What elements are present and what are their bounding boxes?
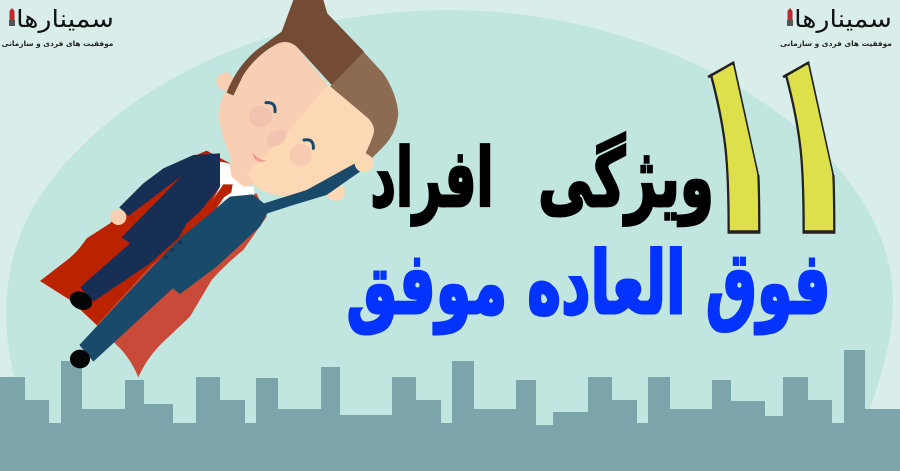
logo wordmark: سمینارها [794,5,892,34]
right hand [355,154,373,172]
number 11 [708,61,836,234]
back cape [40,151,230,325]
back shoe [67,288,95,313]
word: ویژگی: ویژگی [538,132,714,226]
head: light side [243,83,374,197]
front shoe [70,350,90,368]
logo: top right [780,5,892,48]
head: shaded side [218,42,328,187]
logo icon [787,8,793,26]
hair: dark side [227,0,364,96]
logo wordmark: سمینارها [16,5,114,34]
cheek left [249,106,272,128]
ear [216,73,234,91]
first digit [708,61,760,234]
nose [263,126,290,150]
front cape [97,193,267,377]
jacket buttons [164,241,182,259]
tie [179,184,233,237]
hair: light side [330,52,398,160]
front suit and arm [79,163,360,362]
eye right [304,140,313,148]
hidden hand [326,182,345,201]
back arm and leg [80,153,220,302]
cheek right [290,144,312,166]
logo tagline: موفقیت های فردی و سازمانی [780,39,892,48]
left hand [110,209,126,225]
city skyline [0,350,900,471]
logo: top left [2,5,114,48]
second digit [782,61,836,234]
mouth [253,153,267,162]
heading: blue: فوق العاده موفق [346,234,831,334]
superhero businessman [40,0,398,377]
word: افراد: افراد [371,131,493,226]
logo icon [9,8,15,26]
eye left [266,103,275,112]
heading: black [371,131,714,226]
logo tagline: موفقیت های فردی و سازمانی [2,39,114,48]
shirt [208,162,254,208]
